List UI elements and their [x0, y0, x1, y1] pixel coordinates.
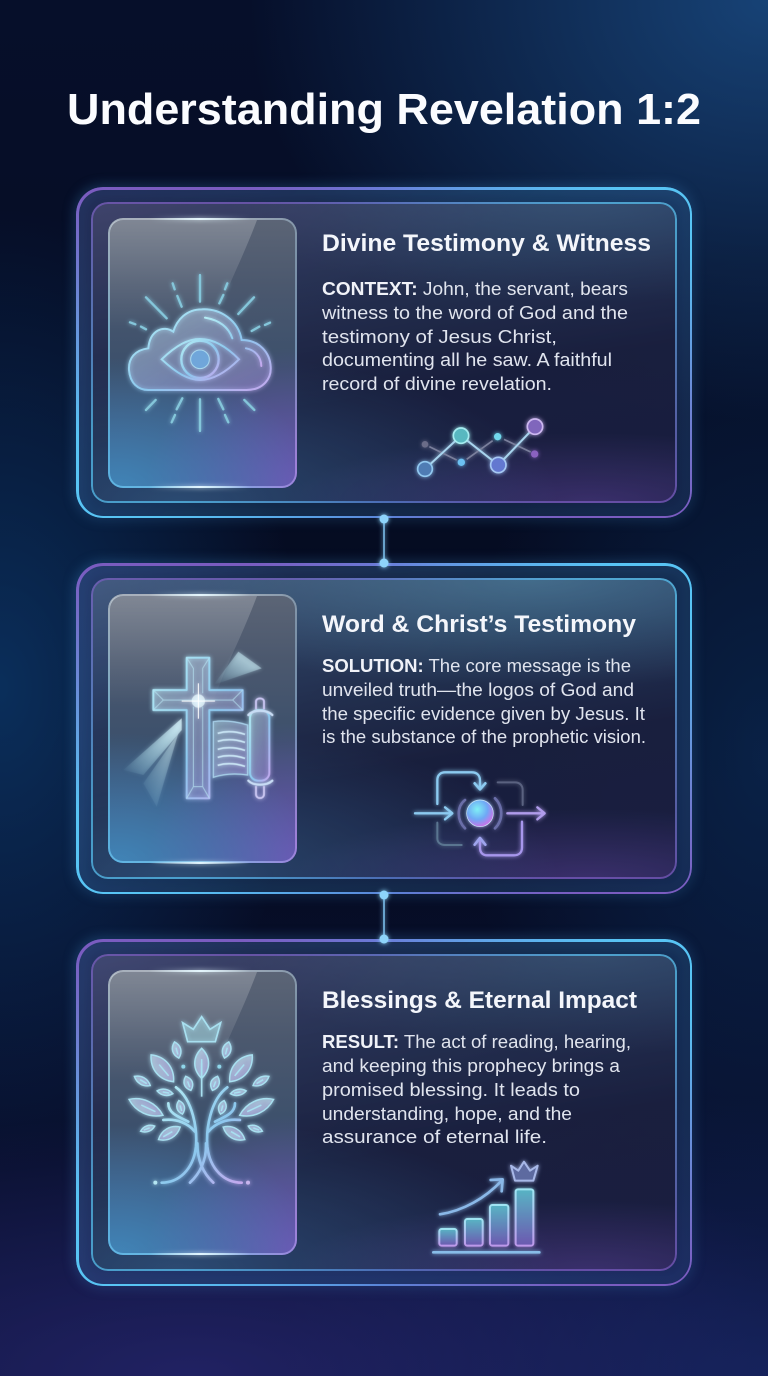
card 1 artwork and text: [110, 214, 651, 492]
heading: Blessings & Eternal Impact: [322, 987, 637, 1014]
icon: cloud with eye: [129, 275, 271, 431]
body text: unveiled truth—the logos of God and: [322, 680, 634, 700]
body text: witness to the word of God and the: [321, 303, 628, 323]
panel highlight: [110, 596, 257, 706]
body text: RESULT: The act of reading, hearing,: [322, 1032, 631, 1052]
panel highlight: [110, 220, 257, 330]
body text: and keeping this prophecy brings a: [322, 1056, 621, 1076]
icon: rising bars with crown: [433, 1162, 539, 1252]
card 3 artwork and text: [110, 966, 637, 1258]
body text: assurance of eternal life.: [322, 1127, 547, 1147]
panel: word and testimony card: [70, 556, 698, 900]
panel: blessings card: [70, 932, 698, 1291]
icon: tree with crown: [126, 1017, 276, 1185]
inner frame: [91, 578, 677, 879]
body text: understanding, hope, and the: [322, 1104, 572, 1124]
body text: CONTEXT: John, the servant, bears: [322, 279, 628, 299]
outer frame: [70, 932, 698, 1291]
heading: Word & Christ’s Testimony: [322, 611, 637, 638]
icon panel background: [108, 970, 297, 1255]
card 2 artwork and text: [110, 590, 646, 868]
icon: network line: [418, 419, 543, 476]
icon panel border: [108, 594, 297, 863]
connector: bottom link: [376, 888, 392, 946]
body text: SOLUTION: The core message is the: [322, 656, 631, 676]
body text: is the substance of the prophetic vision.: [322, 727, 646, 747]
body text: record of divine revelation.: [322, 374, 552, 394]
light streaks: [150, 188, 640, 487]
panel: divine testimony card: [69, 180, 698, 524]
icon: process loop with orb: [415, 772, 545, 855]
panel highlight: [110, 972, 257, 1082]
icon: cross, book and scroll: [123, 652, 272, 807]
icon panel background: [108, 218, 297, 488]
body text: testimony of Jesus Christ,: [322, 327, 557, 347]
body text: [321, 279, 628, 394]
light streaks: [150, 564, 640, 863]
icon panel background: [108, 594, 297, 863]
body text: promised blessing. It leads to: [322, 1080, 580, 1100]
body text: [322, 1032, 631, 1147]
icon panel border: [108, 218, 297, 488]
connector: top link: [376, 512, 392, 570]
body text: documenting all he saw. A faithful: [322, 350, 612, 370]
outer frame: [69, 180, 698, 524]
icon panel border: [108, 970, 297, 1255]
inner frame: [91, 202, 677, 503]
body text: the specific evidence given by Jesus. It: [322, 704, 645, 724]
light streaks: [150, 940, 640, 1254]
outer frame: [70, 556, 698, 900]
title: Understanding Revelation 1:2: [67, 85, 701, 134]
heading: Divine Testimony & Witness: [322, 230, 651, 257]
inner frame: [91, 954, 677, 1271]
body text: [322, 656, 646, 747]
